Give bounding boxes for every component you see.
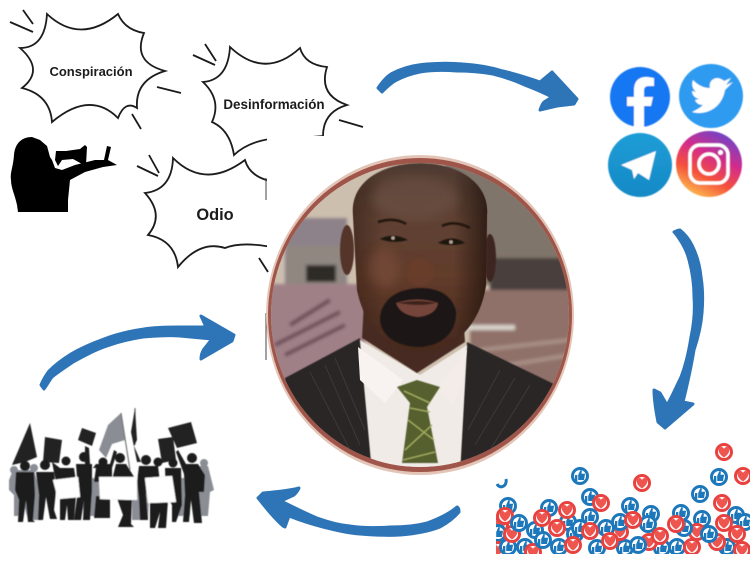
head (353, 163, 487, 351)
portrait photo (265, 155, 575, 480)
crowd background figures (9, 413, 214, 520)
shirt (360, 340, 467, 470)
portrait ring (266, 155, 574, 475)
eyes and brows (378, 220, 470, 245)
protest crowd illustration (9, 408, 214, 528)
icon: Telegram (608, 133, 672, 197)
suit pinstripes (310, 358, 530, 450)
burst rays (193, 44, 363, 127)
speech burst: Odio (137, 155, 285, 272)
white mask behind portrait (267, 136, 377, 266)
tie (397, 380, 440, 463)
icon: Twitter (679, 64, 743, 128)
white banners (53, 476, 176, 503)
placards and flags (12, 408, 197, 465)
burst rays (137, 155, 268, 272)
suit (284, 338, 553, 462)
icon: Facebook (610, 67, 670, 127)
arrow: social networks to likes (654, 230, 703, 428)
burst rays (10, 10, 181, 129)
neck (361, 310, 466, 374)
speech burst: Desinformación (193, 44, 363, 155)
icon: woman with megaphone silhouette (11, 137, 117, 212)
likes and hearts field (490, 444, 750, 560)
front marchers (15, 446, 205, 528)
goatee and mouth (380, 288, 456, 347)
photo background (265, 155, 575, 475)
label: Conspiración: Conspiración (49, 64, 133, 79)
ears (340, 225, 354, 275)
label: Desinformación: Desinformación (223, 97, 325, 112)
arrow: bubbles to social networks (378, 63, 577, 110)
face highlights (374, 176, 454, 217)
arrow: crowd back to portrait (41, 316, 234, 389)
label: Odio: Odio (196, 206, 234, 224)
arrow: likes to protest crowd (258, 488, 459, 535)
icon: Instagram (676, 131, 742, 197)
speech burst: Conspiración (10, 10, 181, 129)
grey flag (99, 413, 125, 458)
